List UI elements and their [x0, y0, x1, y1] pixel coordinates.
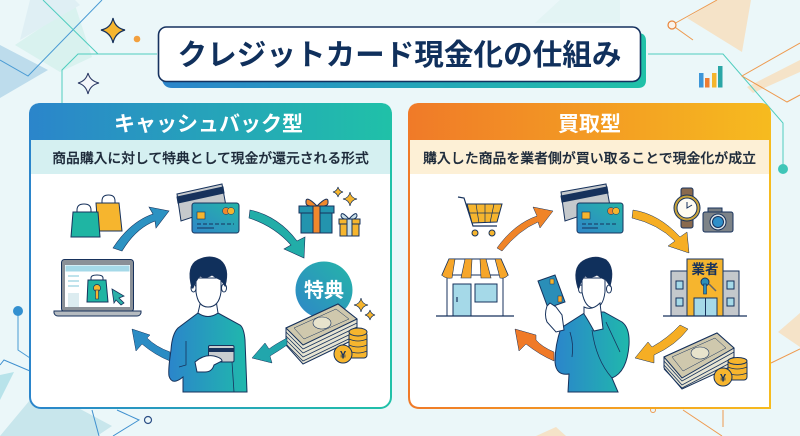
panel header: [29, 103, 392, 140]
person thinking with card: [538, 257, 629, 392]
title: クレジットカード現金化の仕組み: [178, 39, 621, 72]
icon: cash stack with coins: [286, 304, 367, 364]
panel frame: [409, 104, 770, 408]
arrow: person to store: [515, 329, 554, 361]
icon: cash stack with coins: ¥: [340, 350, 347, 362]
icon: camera: [703, 208, 733, 232]
panel header: [408, 103, 771, 140]
arrow: dealer to person: [635, 325, 688, 363]
arrow: person to laptop: [132, 329, 170, 361]
icon: laptop with shop page: [54, 260, 141, 316]
icon: small bar chart: [699, 66, 722, 88]
panel subtitle band: 購入した商品を業者側が買い取ることで現金化が成立: [423, 150, 756, 166]
arrow: money to person: [252, 338, 287, 363]
icon: dealer building: 業者: [692, 261, 718, 277]
panel header: 買取型: [558, 113, 621, 136]
icon: gold sparkle: [101, 18, 125, 43]
panel subtitle band: 商品購入に対して特典として現金が還元される形式: [52, 150, 369, 166]
icon: sparkles near money: [354, 298, 375, 320]
icon: outline sparkle: [78, 73, 99, 94]
panel: cashback type: [29, 103, 392, 408]
panel frame: [30, 104, 391, 408]
badge: benefit: 特典: [304, 279, 344, 302]
icon: credit cards: [177, 184, 239, 233]
icon: cash stack with coins: [664, 333, 747, 389]
icon: sparkles near gifts: [333, 187, 357, 206]
icon: wristwatch: [674, 188, 700, 228]
badge: benefit: [296, 262, 352, 318]
icon: shopping cart: [458, 197, 502, 236]
icon: cash stack with coins: ¥: [720, 372, 727, 384]
icon: orange dot: [134, 36, 140, 42]
arrow: bags to card: [113, 207, 169, 251]
arrow: card to items: [632, 210, 689, 253]
icon: shopping bags: [71, 195, 122, 237]
arrow: cart to card: [497, 207, 553, 251]
panel subtitle band: [31, 140, 390, 174]
icon: credit cards: [561, 184, 623, 233]
title: [158, 27, 646, 88]
panel subtitle band: [410, 140, 769, 174]
icon: dealer building: [663, 259, 747, 316]
panel: buyback type: [408, 103, 771, 408]
panel header: キャッシュバック型: [114, 113, 303, 136]
arrow: card to benefit: [249, 210, 305, 258]
icon: store front: [436, 259, 514, 316]
person with card: [169, 257, 247, 392]
icon: gift boxes: [299, 199, 360, 236]
